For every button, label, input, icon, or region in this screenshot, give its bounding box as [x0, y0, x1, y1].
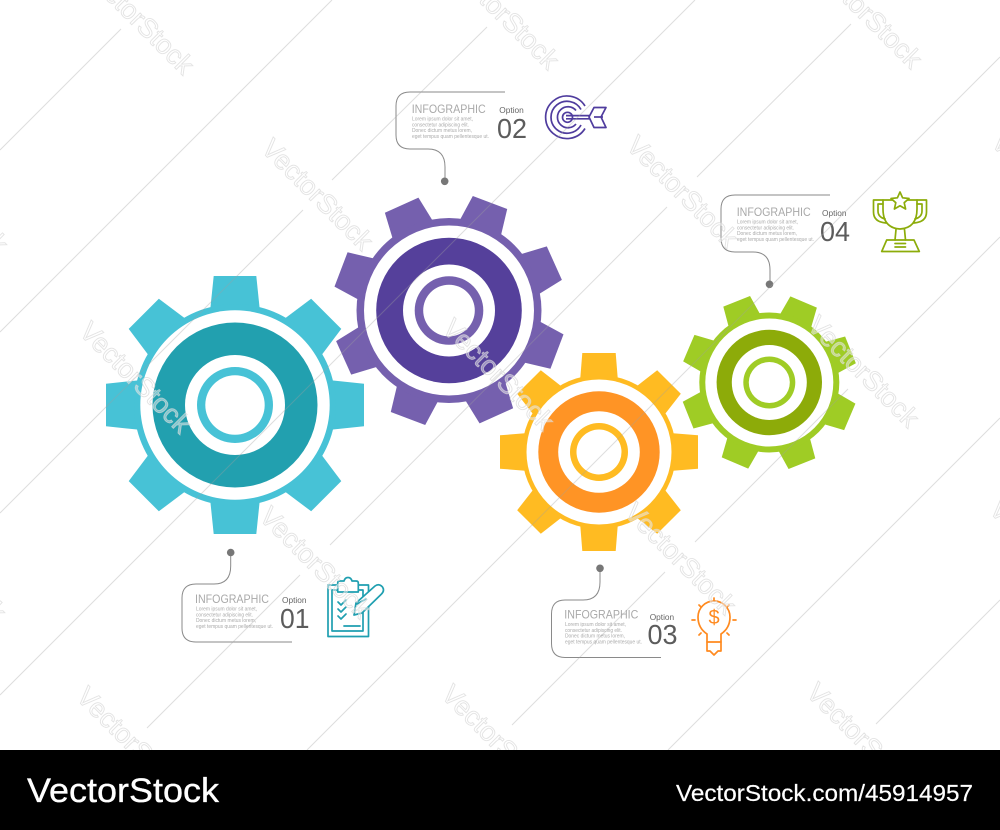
callout: option 02: INFOGRAPHIC — [412, 102, 486, 116]
watermark text: VectorStock — [71, 681, 194, 804]
watermark text: VectorStock — [256, 133, 379, 256]
callout: option 01: Donec dictum metus lorem, — [196, 618, 256, 624]
gear 1: teal — [106, 276, 364, 534]
icon: target with arrow — [546, 96, 606, 139]
callout: option 02: Option — [499, 105, 524, 115]
icon: trophy with star — [874, 192, 926, 252]
callout: option 03 — [552, 564, 678, 658]
watermark text: VectorStock — [619, 497, 742, 620]
callout: option 01: Lorem ipsum dolor sit amet, — [196, 606, 257, 612]
callout: option 02: consectetur adipiscing elit. — [412, 122, 469, 128]
gear 3: yellow and orange — [500, 353, 698, 551]
callout: option 04: Donec dictum metus lorem, — [737, 231, 797, 237]
watermark text: VectorStock — [254, 501, 377, 624]
icon: clipboard with pencil — [328, 578, 383, 636]
callout: option 04: Lorem ipsum dolor sit amet, — [737, 220, 798, 226]
footer bar: VectorStock — [27, 772, 220, 810]
callout: option 01: consectetur adipiscing elit. — [196, 612, 253, 618]
footer bar — [0, 750, 1000, 830]
watermark text: VectorStock — [621, 130, 744, 253]
callout: option 03: Lorem ipsum dolor sit amet, — [565, 622, 626, 628]
callout: option 01: INFOGRAPHIC — [195, 592, 269, 606]
gear 4: green — [682, 295, 857, 470]
callout: option 02: 02 — [497, 113, 527, 144]
callout: option 04: INFOGRAPHIC — [737, 205, 811, 219]
watermark text: VectorStock — [437, 313, 560, 436]
callout: option 03: eget tempus quam pellentesque ut. — [565, 640, 642, 646]
icon: light bulb with dollar sign: $ — [708, 607, 720, 629]
callout: option 03: INFOGRAPHIC — [564, 607, 639, 621]
callout: option 02: Lorem ipsum dolor sit amet, — [412, 116, 473, 122]
callout: option 02: eget tempus quam pellentesque ut. — [412, 134, 489, 140]
callout: option 03: 03 — [648, 619, 678, 650]
callout: option 02: Donec dictum metus lorem, — [412, 128, 472, 134]
callout: option 04: consectetur adipiscing elit. — [737, 225, 794, 231]
watermark text: VectorStock — [436, 679, 559, 802]
icon: light bulb with dollar sign — [692, 598, 736, 655]
callout: option 04: 04 — [820, 216, 850, 247]
callout: option 01: eget tempus quam pellentesque ut. — [196, 624, 273, 630]
callout: option 03: Donec dictum metus lorem, — [565, 634, 625, 640]
watermark text: VectorStock — [801, 677, 924, 800]
callout: option 01 — [182, 549, 310, 642]
callout: option 04 — [721, 195, 850, 288]
callout: option 01: 01 — [280, 603, 310, 634]
callout: option 03: consectetur adipiscing elit. — [565, 628, 622, 634]
gear 2: purple — [333, 195, 565, 426]
callout: option 03: Option — [650, 612, 674, 622]
watermark text: VectorStock — [74, 316, 197, 439]
callout: option 01: Option — [282, 595, 307, 605]
callout: option 02 — [396, 92, 527, 185]
callout: option 04: Option — [822, 208, 847, 218]
watermark text: VectorStock — [802, 310, 925, 433]
callout: option 04: eget tempus quam pellentesque ut. — [737, 237, 814, 243]
footer bar: VectorStock.com/45914957 — [676, 780, 973, 806]
